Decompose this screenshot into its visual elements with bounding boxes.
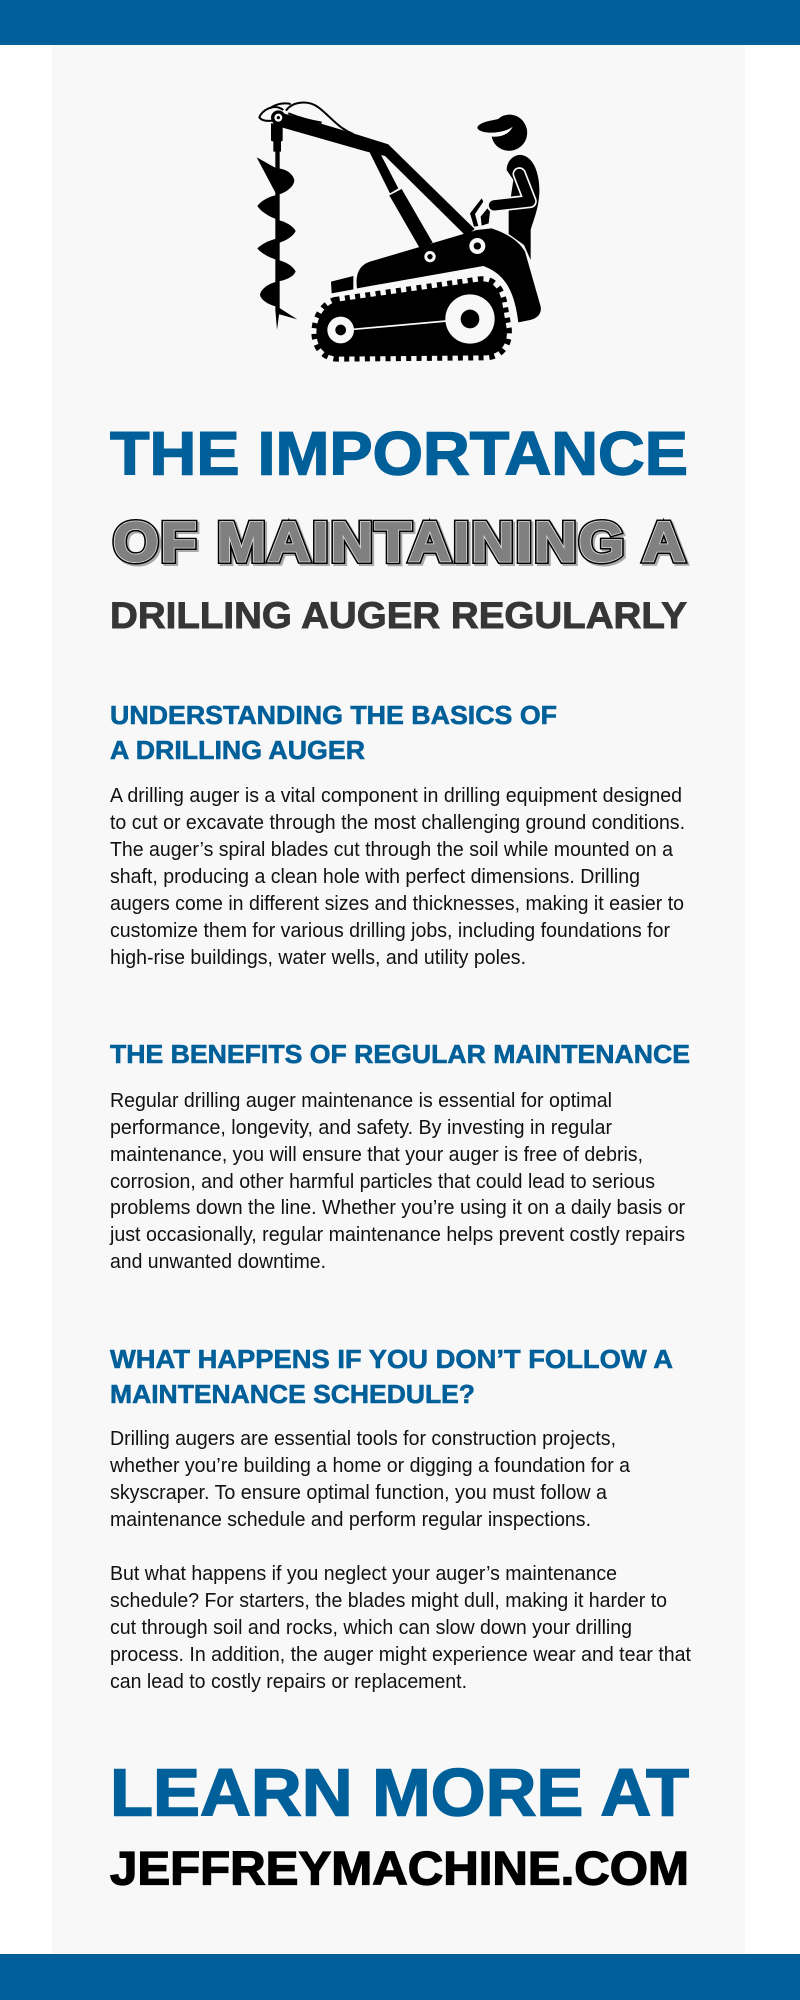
bottom band: [0, 1954, 800, 2000]
title line 2: OF MAINTAINING A: [113, 510, 687, 573]
body paragraph 2: [110, 1562, 691, 1693]
body text: [110, 784, 685, 969]
section: what happens: [109, 1344, 691, 1693]
auger: [257, 123, 297, 330]
title line 1: THE IMPORTANCE: [110, 420, 688, 488]
body text: augers come in different sizes and thicknesses, making it easier to: [110, 892, 684, 915]
body text: high-rise buildings, water wells, and utility poles.: [110, 946, 526, 969]
heading: WHAT HAPPENS IF YOU DON’T FOLLOW A: [110, 1344, 673, 1374]
section: the benefits: [109, 1039, 690, 1273]
body paragraph 1: [109, 1427, 631, 1531]
heading: UNDERSTANDING THE BASICS OF: [110, 700, 557, 730]
machine body: [331, 228, 541, 322]
top band: [0, 0, 800, 45]
body text: shaft, producing a clean hole with perfect dimensions. Drilling: [110, 865, 640, 888]
body paragraph 2: cut through soil and rocks, which can slow down your drilling: [110, 1616, 632, 1639]
heading: A DRILLING AUGER: [110, 735, 365, 765]
title line 2: OF MAINTAINING A: [113, 510, 687, 573]
title line 3: DRILLING AUGER REGULARLY: [110, 594, 687, 636]
body paragraph 2: schedule? For starters, the blades might dull, making it harder to: [110, 1589, 667, 1612]
section: understanding the basics: [110, 700, 685, 969]
website: JEFFREYMACHINE.COM: [110, 1842, 689, 1894]
icon: skid steer with drilling auger and operator: [256, 102, 541, 362]
body text: Regular drilling auger maintenance is essential for optimal: [110, 1089, 612, 1112]
heading: [110, 700, 557, 765]
operator: [470, 115, 539, 260]
body text: maintenance, you will ensure that your auger is free of debris,: [110, 1143, 643, 1166]
body text: [109, 1089, 685, 1273]
body paragraph 1: whether you’re building a home or digging a foundation for a: [109, 1454, 631, 1477]
body paragraph 2: can lead to costly repairs or replacement.: [110, 1670, 467, 1693]
body text: and unwanted downtime.: [110, 1250, 326, 1273]
hydraulic hoses: [259, 103, 353, 134]
title: [110, 420, 689, 636]
body text: performance, longevity, and safety. By investing in regular: [110, 1116, 612, 1139]
title line 2: OF MAINTAINING A: [115, 512, 689, 575]
body paragraph 1: skyscraper. To ensure optimal function, you must follow a: [110, 1481, 608, 1504]
boom arm: [271, 110, 475, 249]
call to action: [110, 1756, 689, 1894]
body text: corrosion, and other harmful particles that could lead to serious: [110, 1170, 655, 1193]
crawler track: [316, 281, 507, 357]
title line 2: OF MAINTAINING A: [113, 510, 687, 573]
heading: MAINTENANCE SCHEDULE?: [110, 1379, 475, 1409]
body paragraph 1: maintenance schedule and perform regular inspections.: [110, 1508, 591, 1531]
body text: problems down the line. Whether you’re using it on a daily basis or: [110, 1196, 685, 1219]
heading: THE BENEFITS OF REGULAR MAINTENANCE: [110, 1039, 690, 1069]
body text: A drilling auger is a vital component in drilling equipment designed: [110, 784, 682, 807]
body paragraph 2: But what happens if you neglect your auger’s maintenance: [110, 1562, 617, 1585]
body text: customize them for various drilling jobs, including foundations for: [110, 919, 670, 942]
body text: just occasionally, regular maintenance helps prevent costly repairs: [109, 1223, 685, 1246]
heading: [110, 1344, 673, 1409]
body text: to cut or excavate through the most challenging ground conditions.: [110, 811, 685, 834]
body paragraph 1: Drilling augers are essential tools for construction projects,: [110, 1427, 616, 1450]
learn more at: LEARN MORE AT: [110, 1756, 689, 1830]
body text: The auger’s spiral blades cut through the soil while mounted on a: [110, 838, 674, 861]
body paragraph 2: process. In addition, the auger might experience wear and tear that: [110, 1643, 691, 1666]
